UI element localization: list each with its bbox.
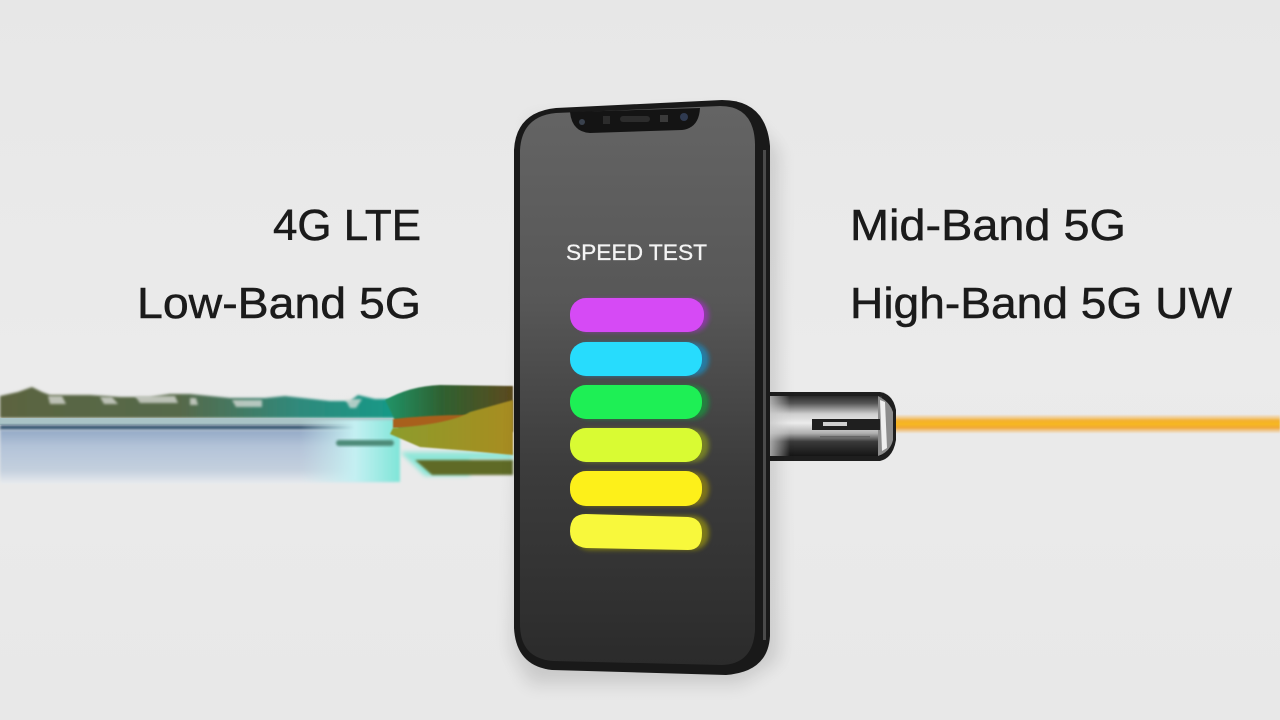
small islet bbox=[336, 440, 394, 446]
label: High-Band 5G UW: High-Band 5G UW bbox=[850, 279, 1232, 328]
bar 1: purple bbox=[570, 298, 709, 332]
phone shadow bbox=[512, 112, 778, 684]
red shrubs bbox=[393, 415, 480, 428]
far shore strip bbox=[0, 418, 393, 425]
bar 2: cyan bbox=[570, 342, 709, 376]
grass bank bbox=[390, 400, 513, 455]
label: 4G LTE: 4G LTE bbox=[273, 201, 421, 250]
phone bbox=[512, 100, 778, 684]
bar 6: pale yellow bbox=[570, 514, 709, 550]
pale sky gaps between trees bbox=[48, 396, 362, 408]
bar 5: yellow bbox=[570, 471, 709, 506]
tree line bbox=[0, 387, 400, 418]
label: Low-Band 5G: Low-Band 5G bbox=[137, 279, 421, 328]
bar 3: green bbox=[570, 385, 709, 419]
notch bbox=[570, 108, 700, 133]
phone body bbox=[514, 100, 770, 675]
speed bars bbox=[570, 298, 709, 550]
water bbox=[0, 430, 395, 484]
side highlight bbox=[763, 150, 766, 640]
phone screen bbox=[520, 106, 755, 665]
bar 4: lime bbox=[570, 428, 709, 462]
device: metal cylinder with laser head bbox=[770, 392, 896, 461]
beam: orange laser bbox=[890, 415, 1280, 433]
landscape: lake scene at left of phone bbox=[0, 385, 513, 484]
screen title: SPEED TEST bbox=[566, 240, 707, 265]
reflection bbox=[415, 460, 513, 475]
bank trees bbox=[385, 385, 513, 432]
label: Mid-Band 5G: Mid-Band 5G bbox=[850, 201, 1126, 250]
